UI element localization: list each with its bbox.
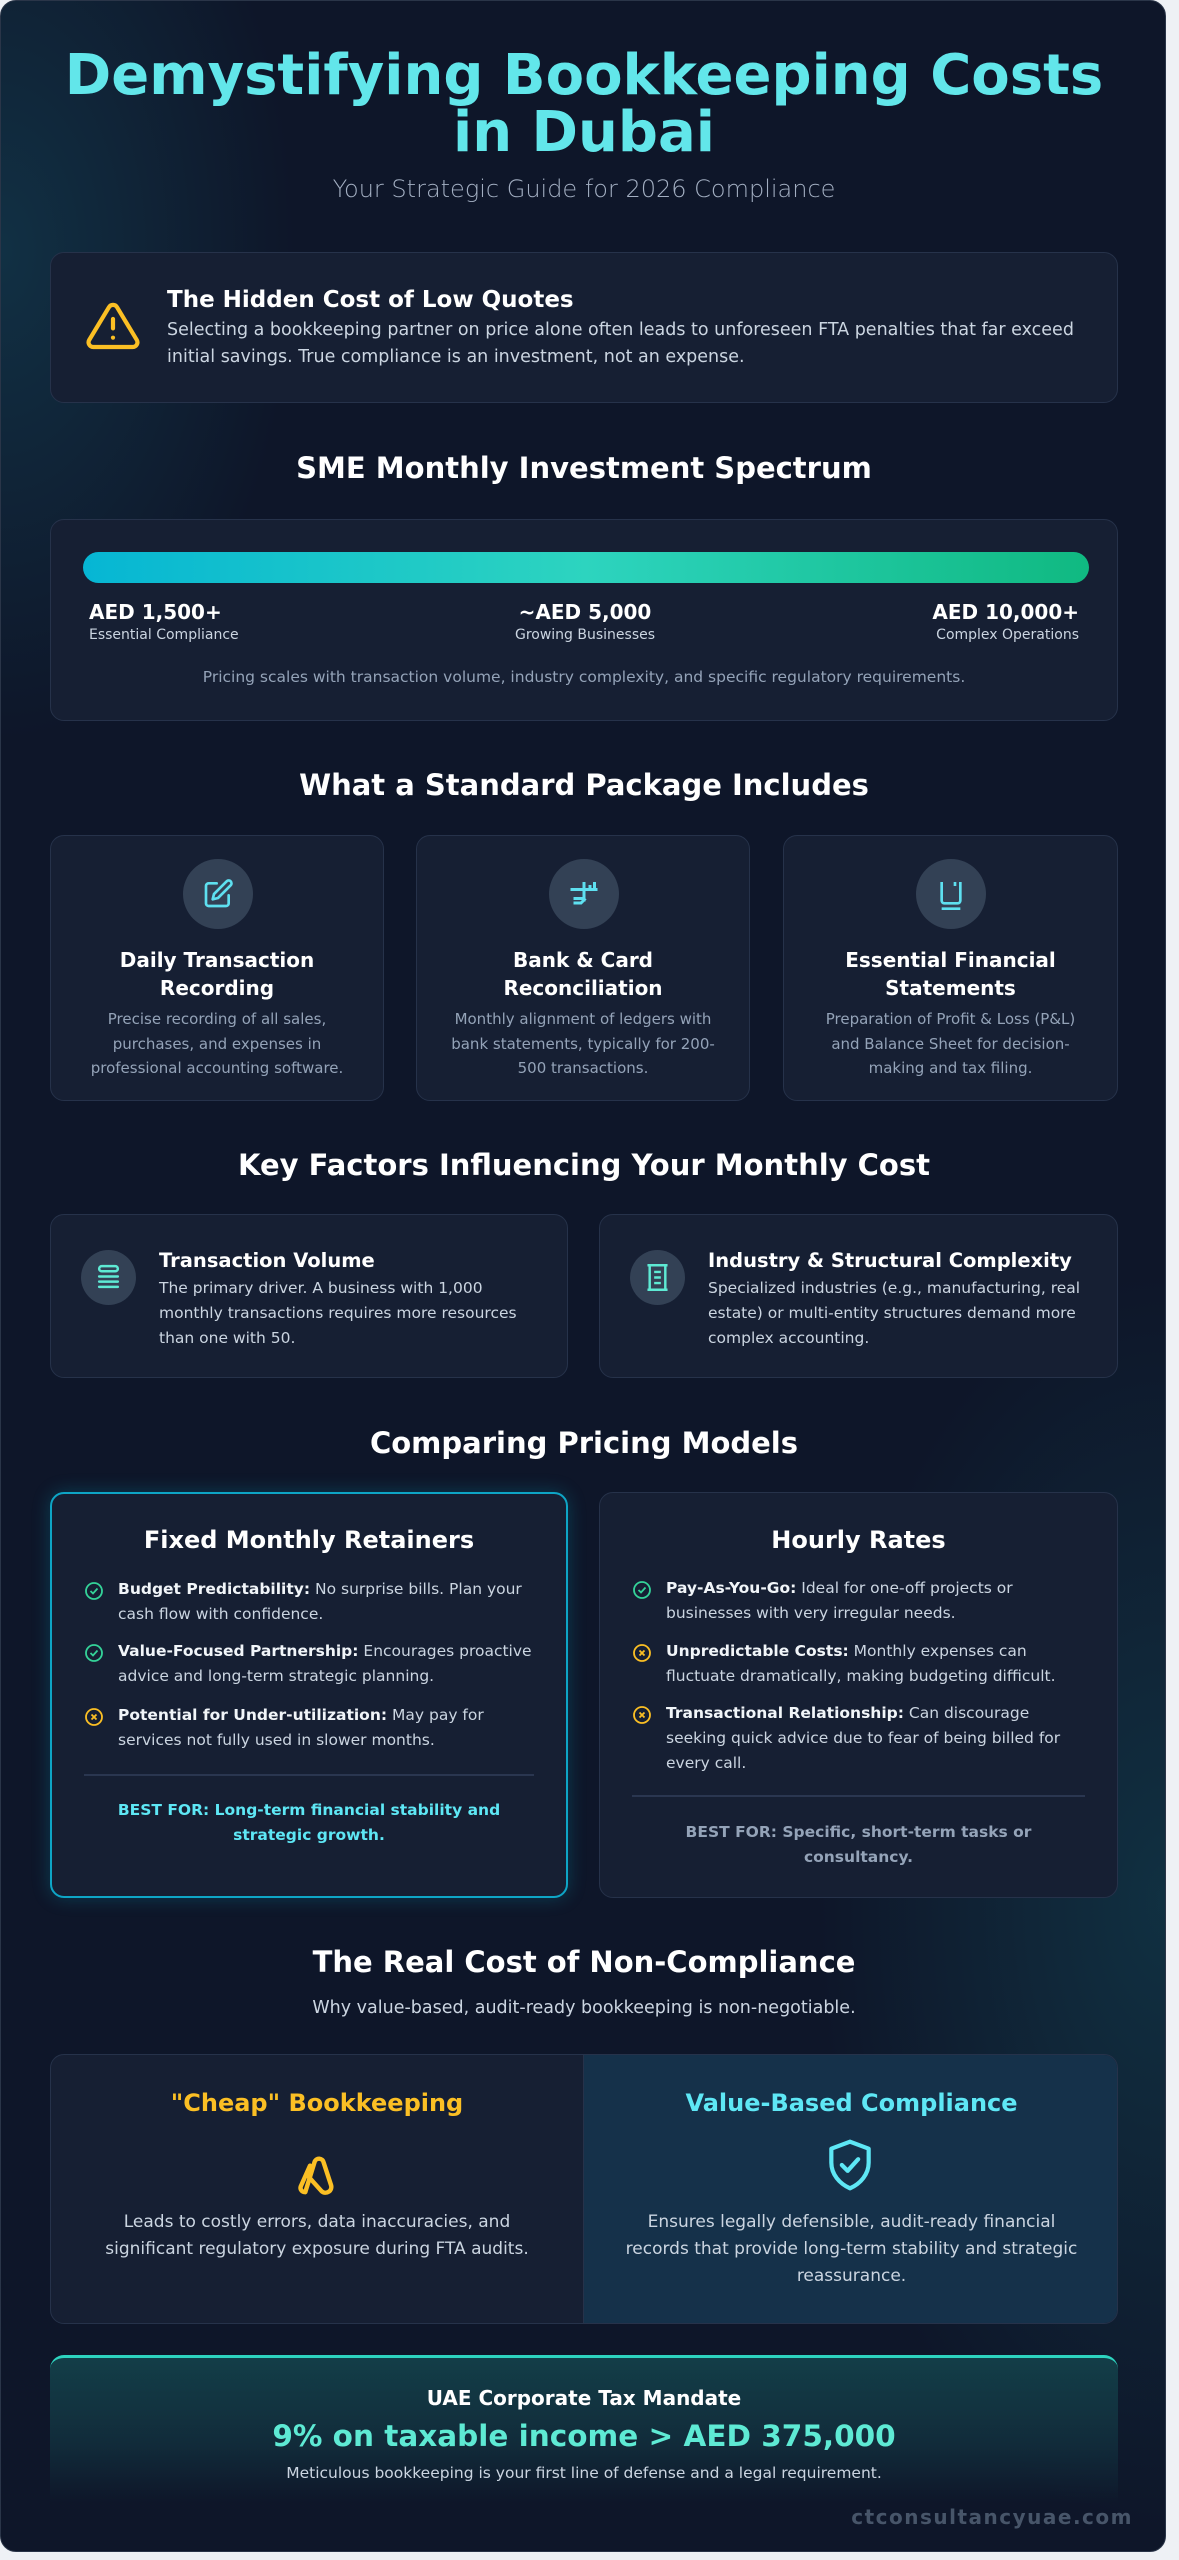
card: industry complexity [599, 1214, 1118, 1378]
card: daily transaction recording [50, 835, 384, 1101]
column: cheap: Leads to costly errors, data inaccuracies, and significant regulatory exposure during FTA audits. [105, 2212, 529, 2259]
label: low: Essential Compliance [89, 627, 239, 643]
label: mid [515, 600, 655, 643]
label: mid: Growing Businesses [515, 627, 655, 643]
card: transaction volume: Transaction Volume [159, 1249, 375, 1272]
label: high: AED 10,000+ [932, 600, 1079, 624]
icon: statement [916, 859, 986, 929]
watermark: ctconsultancyuae.com [851, 2505, 1133, 2529]
subtitle: Your Strategic Guide for 2026 Compliance [333, 175, 835, 203]
column: value-based [583, 2055, 1119, 2325]
heading: spectrum: SME Monthly Investment Spectrum [296, 451, 872, 485]
big stat: 9% on taxable income > AED 375,000 [272, 2419, 896, 2453]
panel: fixed retainers: Fixed Monthly Retainers [144, 1526, 474, 1554]
panel: spectrum [50, 519, 1118, 721]
best for: BEST FOR: Specific, short-term tasks or consultancy. [686, 1823, 1031, 1866]
alert text: Selecting a bookkeeping partner on price alone often leads to unforeseen FTA penalties that far exceed initial savings. True compliance is an investment, not an expense. [167, 320, 1074, 367]
column: cheap [105, 2089, 529, 2259]
card: financial statements: Statements [885, 976, 1016, 1000]
item: transactional: Transactional Relationship: Can discourage seeking quick advice due to fear of being billed for every call. [666, 1704, 1060, 1772]
heading: key factors: Key Factors Influencing Your Monthly Cost [238, 1148, 930, 1182]
card: bank reconciliation: Bank & Card [513, 948, 653, 972]
icon: pencil [183, 859, 253, 929]
card: industry complexity: Specialized industries (e.g., manufacturing, real estate) or multi-entity structures demand more complex accounting. [708, 1279, 1080, 1347]
icon: document [630, 1250, 685, 1305]
gradient bar [83, 552, 1089, 583]
card: bank reconciliation: Reconciliation [503, 976, 663, 1000]
title [65, 43, 1103, 165]
card: transaction volume: The primary driver. A business with 1,000 monthly transactions requires more resources than one with 50. [159, 1279, 517, 1347]
column: value-based: Ensures legally defensible, audit-ready financial records that provide long-term stability and strategic reassurance. [626, 2212, 1077, 2286]
alert heading: The Hidden Cost of Low Quotes [167, 287, 574, 313]
icon: reconciliation [549, 859, 619, 929]
card: bank reconciliation: Monthly alignment of ledgers with bank statements, typically for 200-500 transactions. [451, 1010, 715, 1077]
heading: pricing models: Comparing Pricing Models [370, 1426, 798, 1460]
item: value partnership: Value-Focused Partnership: Encourages proactive advice and long-term strategic planning. [118, 1642, 532, 1685]
panel: hourly rates [599, 1492, 1118, 1898]
icon: shield check [829, 2140, 871, 2190]
panel: hidden cost alert [50, 252, 1118, 403]
icon: stack [81, 1250, 136, 1305]
card: daily transaction recording: Precise recording of all sales, purchases, and expenses in professional accounting software. [91, 1010, 343, 1077]
label: high [932, 600, 1079, 643]
title: in Dubai [453, 100, 715, 165]
card: daily transaction recording: Recording [160, 976, 274, 1000]
best for: BEST FOR: Long-term financial stability and strategic growth. [118, 1801, 500, 1844]
panel: tax mandate [50, 2355, 1118, 2503]
item: under-utilization: Potential for Under-utilization: May pay for services not fully used in slower months. [118, 1706, 484, 1749]
card: daily transaction recording: Daily Transaction [120, 948, 314, 972]
panel: tax mandate: UAE Corporate Tax Mandate [427, 2386, 741, 2410]
item: pay as you go: Pay-As-You-Go: Ideal for one-off projects or businesses with very irregular needs. [666, 1579, 1013, 1622]
label: high: Complex Operations [936, 627, 1079, 643]
heading: package: What a Standard Package Includes [299, 768, 869, 802]
card: transaction volume [50, 1214, 568, 1378]
column: cheap: "Cheap" Bookkeeping [171, 2089, 463, 2117]
card: financial statements: Preparation of Profit & Loss (P&L) and Balance Sheet for decision-making and tax filing. [826, 1010, 1075, 1077]
label: low [89, 600, 239, 643]
card: financial statements [783, 835, 1118, 1101]
item: unpredictable: Unpredictable Costs: Monthly expenses can fluctuate dramatically, making budgeting difficult. [666, 1642, 1056, 1685]
card: industry complexity: Industry & Structural Complexity [708, 1249, 1072, 1272]
label: mid: ~AED 5,000 [519, 600, 651, 624]
column: value-based: Value-Based Compliance [685, 2089, 1018, 2117]
label: low: AED 1,500+ [89, 600, 222, 624]
panel: tax mandate: Meticulous bookkeeping is your first line of defense and a legal requirement. [286, 2464, 882, 2482]
card: financial statements: Essential Financial [845, 948, 1056, 972]
heading: non-compliance: The Real Cost of Non-Compliance [313, 1945, 855, 1979]
card: bank reconciliation [416, 835, 750, 1101]
icon: warning triangle [86, 302, 140, 350]
title: Demystifying Bookkeeping Costs [65, 43, 1103, 108]
panel: fixed retainers [50, 1492, 568, 1898]
panel: comparison [50, 2054, 1118, 2324]
subheading: Why value-based, audit-ready bookkeeping is non-negotiable. [312, 1998, 856, 2018]
item: budget predictability: Budget Predictability: No surprise bills. Plan your cash flow with confidence. [118, 1580, 522, 1623]
footnote: Pricing scales with transaction volume, industry complexity, and specific regulatory requirements. [203, 668, 965, 686]
icon: broken link [298, 2156, 334, 2195]
panel: hourly rates: Hourly Rates [771, 1526, 946, 1554]
